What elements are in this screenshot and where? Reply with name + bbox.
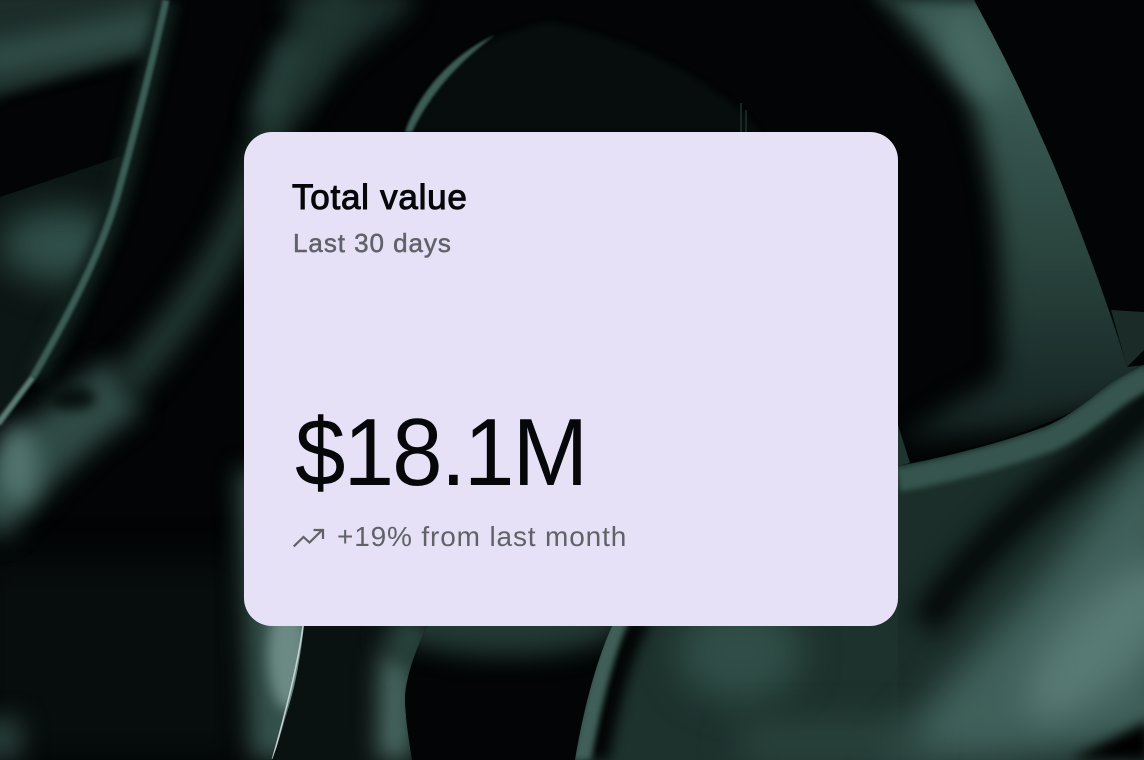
arc at top centre: [405, 22, 760, 132]
icon: trending up arrow: [293, 528, 324, 548]
bottom-right sheet: [570, 360, 1144, 760]
top-left sheet: [0, 0, 170, 102]
ribbon edge left: [34, 0, 167, 377]
ribbon behind card: [290, 0, 410, 130]
panel: total value card: [244, 132, 898, 626]
heading: Total value: Total value: [292, 178, 468, 217]
bottom-left highlight: [0, 385, 125, 520]
metric: $18.1M: $18.1M: [295, 399, 586, 506]
lit ribbon left of white line: [238, 470, 320, 760]
dark pane with curved edge: [272, 626, 427, 760]
text: Last 30 days: Last 30 days: [293, 228, 452, 258]
text: change from last month: +19% from last month: [337, 521, 627, 552]
top-right ribbon: [1111, 310, 1144, 367]
